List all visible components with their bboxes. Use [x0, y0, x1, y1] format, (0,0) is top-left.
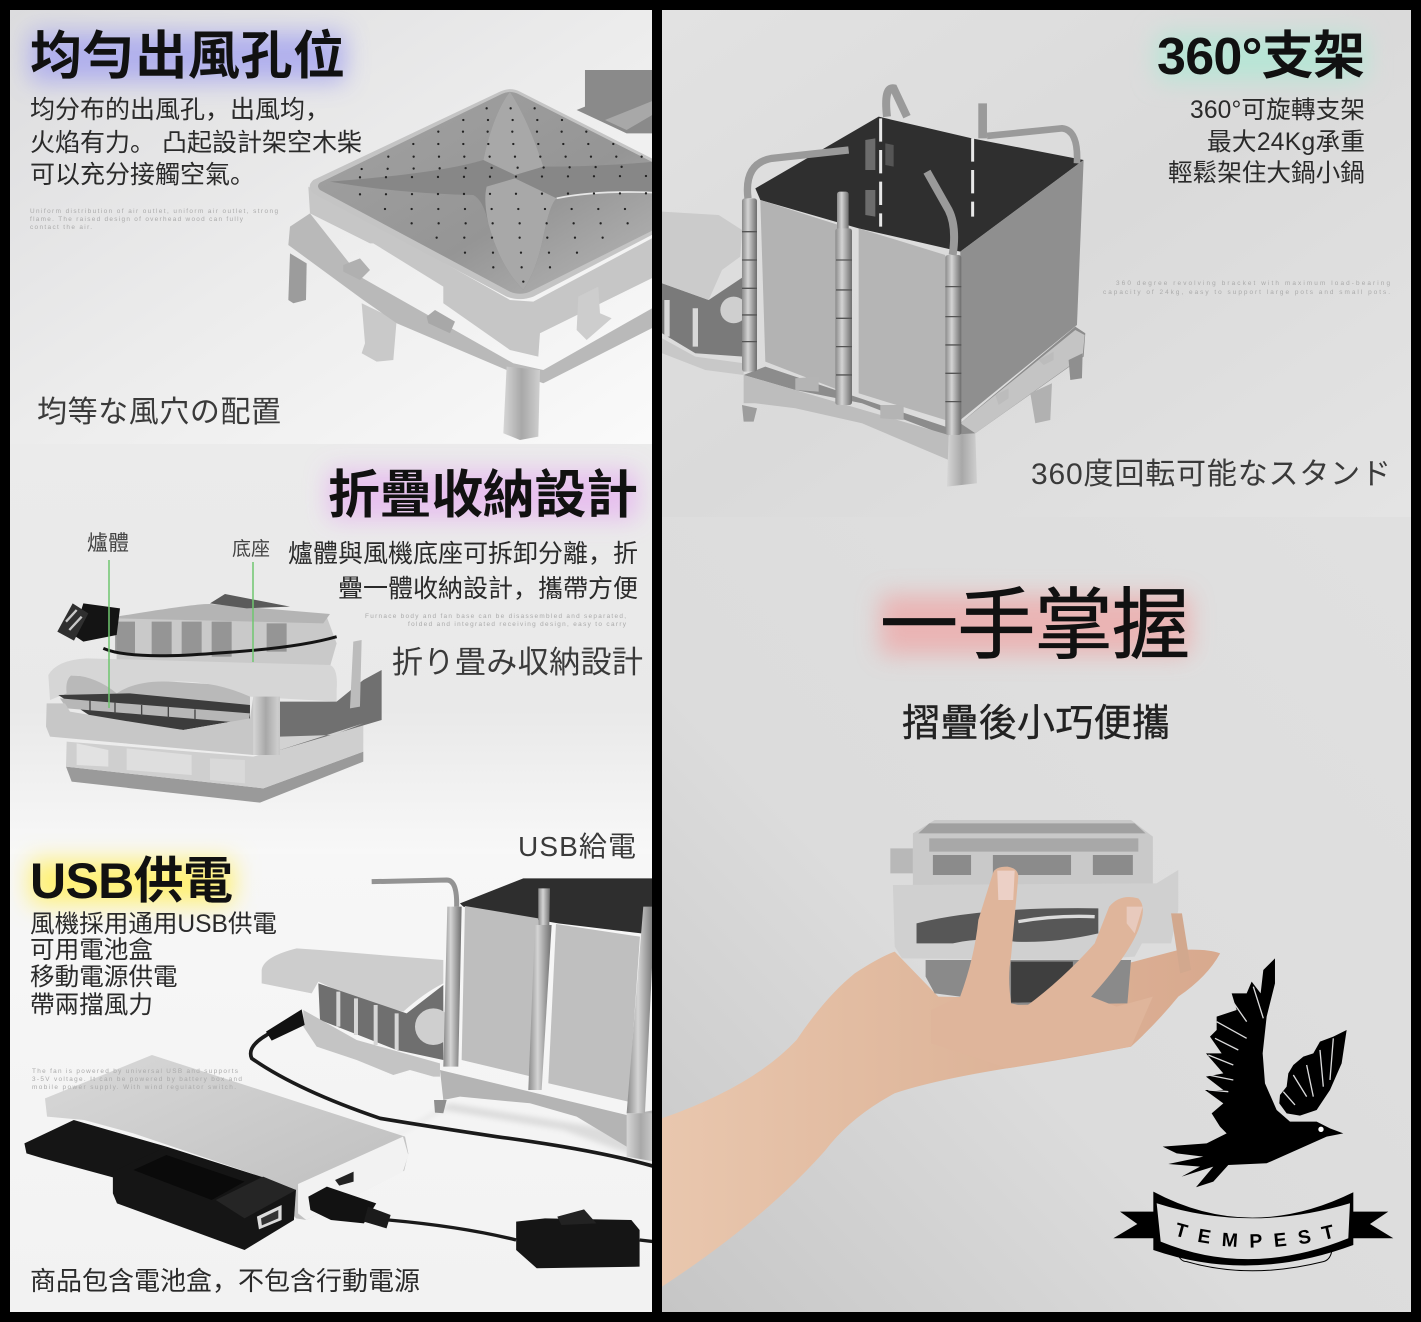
photo: fan and windscreen stand — [662, 88, 1085, 487]
title: foldable storage design: 折疊收納設計 — [328, 467, 638, 525]
fingers — [931, 867, 1153, 1068]
panel: 360 degree stand — [662, 10, 1411, 517]
text block: air holes description: 均分布的出風孔，出風均， — [30, 96, 330, 124]
sheet panels — [760, 200, 839, 390]
panel: uniform air holes — [10, 10, 655, 444]
text block: stand description — [1168, 96, 1365, 187]
upper frame — [48, 658, 337, 702]
text block: english caption: 3-5V voltage. It can be powered by battery box and — [32, 1076, 242, 1083]
base — [744, 327, 1085, 438]
photo: folded stove with USB plug — [46, 594, 382, 803]
photo: stove with fan — [262, 878, 655, 1163]
clips — [795, 377, 819, 392]
USB plug — [308, 1187, 376, 1223]
text block: english caption: folded and integrated receiving design, easy to carry — [408, 621, 627, 628]
wire hooks — [747, 150, 849, 198]
pointer line: base — [252, 562, 254, 662]
icon: ribbon — [1114, 1192, 1394, 1272]
inline switch — [516, 1218, 640, 1268]
text block: stand description: 360°可旋轉支架 — [1190, 96, 1365, 124]
pointer line: stove body — [108, 560, 110, 708]
japanese caption: 360 stand: 360度回転可能なスタンド — [1031, 458, 1391, 491]
usb plug — [73, 603, 120, 642]
text block: stand description: 最大24Kg承重 — [1207, 128, 1365, 156]
title glow: yellow — [30, 860, 233, 904]
text block: folding description: 疊一體收納設計，攜帶方便 — [338, 575, 638, 603]
text block: english caption: 360 degree revolving bracket with maximum load-bearing — [1116, 280, 1390, 287]
fan housing — [116, 617, 337, 667]
label: base: 底座 — [232, 538, 270, 560]
cable: fan to power — [251, 1009, 655, 1167]
base tray — [66, 752, 363, 803]
icon: bird — [1163, 958, 1347, 1187]
panel: USB power — [10, 831, 655, 1312]
panel: foldable storage — [10, 444, 652, 854]
text block: english caption: Uniform distribution of air outlet, uniform air outlet, strong — [30, 208, 278, 215]
stove — [913, 820, 1153, 885]
windscreen — [460, 878, 655, 935]
text block: english caption: mobile power supply. With wind regulator switch. — [32, 1084, 236, 1091]
hinge rods — [742, 198, 757, 372]
text block: USB description: 可用電池盒 — [30, 936, 153, 964]
battery box — [24, 1120, 166, 1177]
text block: USB description: 風機採用通用USB供電 — [30, 910, 277, 938]
text block: folding description — [288, 540, 638, 603]
text block: english caption: Furnace body and fan base can be disassembled and separated, — [365, 613, 626, 620]
photo: hand holding folded stove — [662, 820, 1220, 1287]
text block: air holes description — [30, 96, 362, 189]
text block: english caption: flame. The raised design of overhead wood can fully — [30, 216, 244, 223]
text block: english caption: capacity of 24kg, easy to support large pots and small pots. — [1103, 289, 1390, 296]
text block: air holes description: 可以充分接觸空氣。 — [30, 161, 255, 189]
title: uniform air holes: 均勻出風孔位 — [30, 28, 345, 86]
inner backing behind frame — [64, 676, 250, 705]
base — [440, 1070, 652, 1146]
hinges — [443, 907, 462, 1067]
hinge strip — [58, 693, 250, 730]
japanese caption: uniform holes: 均等な風穴の配置 — [37, 396, 281, 429]
back walls — [755, 117, 1084, 252]
photo: stove top plate — [288, 70, 655, 440]
text block: english caption — [30, 208, 278, 229]
text block: USB description: 移動電源供電 — [30, 963, 178, 991]
label: stove body: 爐體 — [87, 532, 129, 555]
title: fits in one hand: 一手掌握 — [880, 581, 1190, 669]
right inner — [280, 670, 382, 750]
text block: stand description: 輕鬆架住大鍋小鍋 — [1168, 159, 1365, 187]
top plate — [310, 89, 655, 299]
subtitle: compact after folding: 摺疊後小巧便攜 — [902, 703, 1170, 745]
text block: english caption — [365, 613, 627, 628]
power bank — [45, 1055, 408, 1220]
panel: fits in one hand — [662, 517, 1411, 1312]
text block: air holes description: 火焰有力。 凸起設計架空木柴 — [30, 129, 362, 157]
title: USB power: USB供電 — [30, 853, 233, 909]
text block: english caption: The fan is powered by universal USB and supports — [32, 1068, 238, 1075]
fan — [662, 277, 744, 357]
logo: TEMPEST bird with ribbon — [1114, 958, 1394, 1272]
ribbon text: TEMPEST: TEMPEST — [1177, 1222, 1332, 1248]
text block: english caption — [32, 1068, 242, 1091]
title glow: pink — [328, 470, 638, 520]
text block: english caption: contact the air. — [30, 224, 92, 231]
text block: USB description — [30, 910, 277, 1019]
title glow: blue — [30, 32, 345, 82]
japanese caption: USB power: USB給電 — [518, 831, 636, 862]
text block: folding description: 爐體與風機底座可拆卸分離，折 — [288, 540, 638, 568]
title glow: teal — [1157, 34, 1365, 80]
lower frame — [46, 697, 280, 755]
photo: power bank, battery box, USB plug and switch — [24, 1055, 654, 1268]
arm and palm — [662, 950, 1220, 1287]
text block: english caption — [1103, 280, 1390, 296]
note: contents of the package: 商品包含電池盒，不包含行動電源 — [30, 1266, 420, 1296]
fan cover — [262, 948, 443, 1012]
title glow: red — [880, 595, 1190, 655]
text block: USB description: 帶兩擋風力 — [30, 991, 153, 1019]
japanese caption: folding: 折り畳み収納設計 — [392, 645, 643, 680]
title: 360 stand: 360°支架 — [1157, 28, 1365, 86]
